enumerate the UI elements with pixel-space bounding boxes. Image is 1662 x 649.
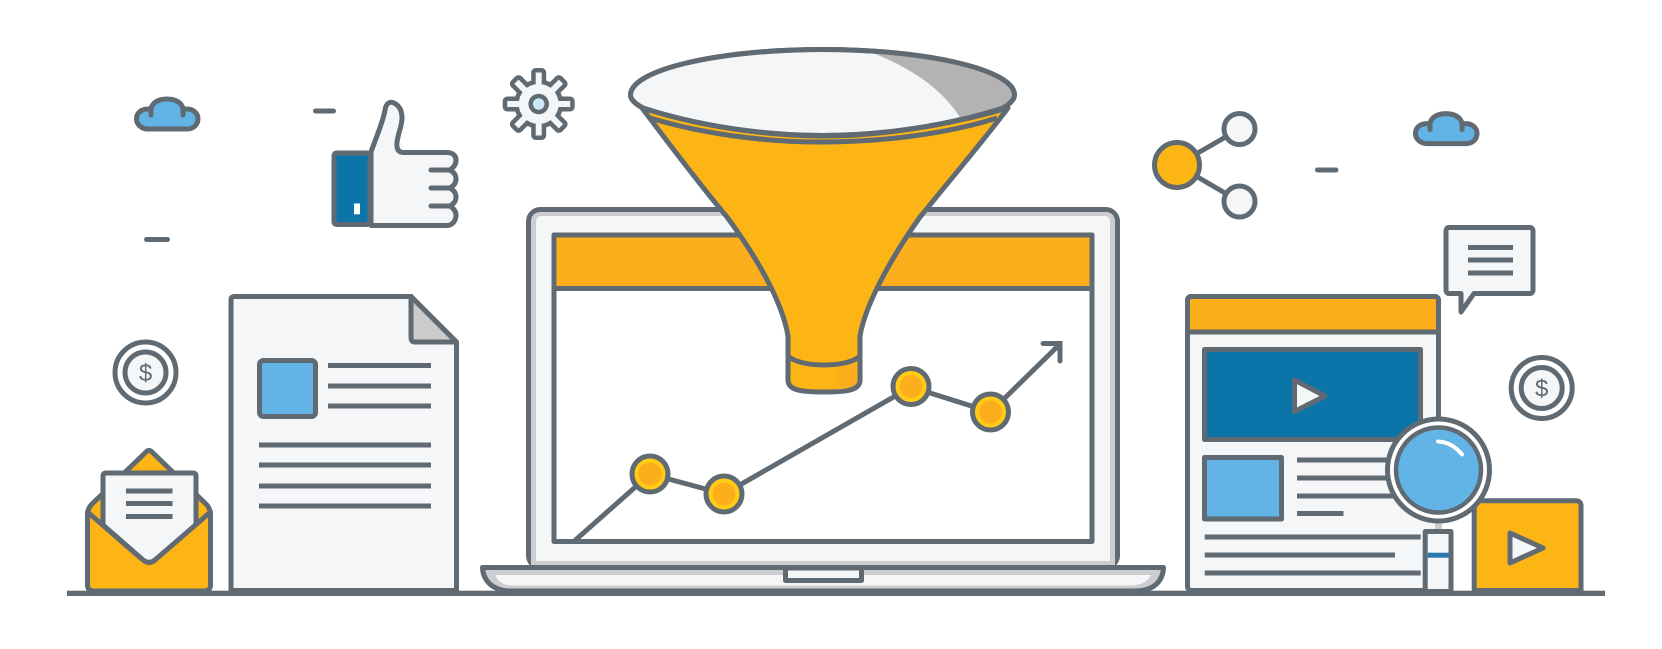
icon: envelope with letter — [88, 450, 210, 591]
video player — [1204, 350, 1420, 440]
ground line — [67, 591, 1605, 596]
funnel neck band — [788, 356, 860, 365]
funnel rim — [630, 50, 1014, 136]
finger lines — [431, 170, 450, 206]
funnel body — [642, 108, 1008, 392]
panel: document — [231, 296, 456, 590]
funnel front lip — [650, 118, 997, 142]
magnifier outer ring — [1388, 419, 1490, 521]
screen — [554, 235, 1092, 542]
cuff — [334, 153, 370, 224]
icon: thumbs up — [334, 102, 456, 226]
share main node — [1154, 142, 1200, 188]
dash: left — [144, 237, 170, 242]
icon: share — [1154, 114, 1255, 217]
magnifier neck — [1435, 521, 1442, 530]
dash: top left — [313, 108, 336, 114]
icon: right dollar coin: $ — [1535, 376, 1548, 402]
video play button — [1294, 380, 1325, 412]
letter lines — [126, 491, 172, 516]
page — [231, 296, 456, 590]
chart point 3 — [893, 368, 929, 404]
icon: right dollar coin — [1511, 358, 1572, 418]
funnel inner shadow — [876, 54, 1012, 118]
thumbnail — [1204, 458, 1282, 519]
laptop notch — [786, 568, 862, 580]
envelope front — [88, 512, 210, 591]
laptop lid — [528, 210, 1118, 568]
illustration: marketing funnel scene — [67, 47, 1605, 596]
funnel neck shade — [838, 358, 858, 390]
icon: left cloud — [136, 99, 198, 129]
funnel rim outline — [630, 50, 1014, 136]
panel: web page window — [1188, 296, 1438, 590]
lid inner shade — [531, 212, 1115, 565]
base highlight — [495, 575, 1151, 586]
lens highlight — [1438, 442, 1462, 454]
icon: right cloud — [1416, 114, 1477, 144]
share top node — [1224, 114, 1255, 144]
icon: left dollar coin — [115, 342, 176, 403]
chart point 2 — [706, 476, 742, 512]
text lines beside thumbnail — [1297, 460, 1393, 514]
window header — [1188, 296, 1438, 332]
text lines below — [1205, 537, 1421, 573]
cuff button — [354, 204, 360, 214]
letter — [103, 473, 196, 562]
laptop base — [482, 568, 1164, 591]
long text lines — [259, 445, 431, 506]
icon: gear — [507, 72, 570, 136]
magnifier lens — [1396, 428, 1481, 512]
icon: speech bubble — [1446, 228, 1533, 312]
icon: magnifying glass — [1388, 419, 1490, 592]
chart arrowhead — [1043, 344, 1060, 361]
icon: orange video card — [1474, 501, 1581, 590]
chart line — [576, 345, 1059, 540]
page fold — [411, 296, 456, 342]
icon: left dollar coin: $ — [139, 360, 152, 387]
chart point 4 — [972, 394, 1008, 430]
short text lines — [328, 366, 431, 406]
magnifier handle — [1425, 532, 1451, 592]
screen header band — [554, 235, 1092, 288]
panel: laptop — [482, 210, 1164, 591]
dash: right — [1315, 168, 1338, 172]
line chart — [576, 344, 1060, 540]
share bottom node — [1224, 186, 1255, 217]
funnel — [630, 45, 1020, 392]
envelope back and flap — [88, 450, 210, 560]
share connectors — [1177, 129, 1240, 202]
chart point 1 — [632, 456, 668, 492]
window body — [1188, 296, 1438, 590]
image placeholder — [260, 360, 316, 416]
magnifier handle stripe — [1428, 553, 1448, 558]
thumb hand — [371, 102, 456, 226]
